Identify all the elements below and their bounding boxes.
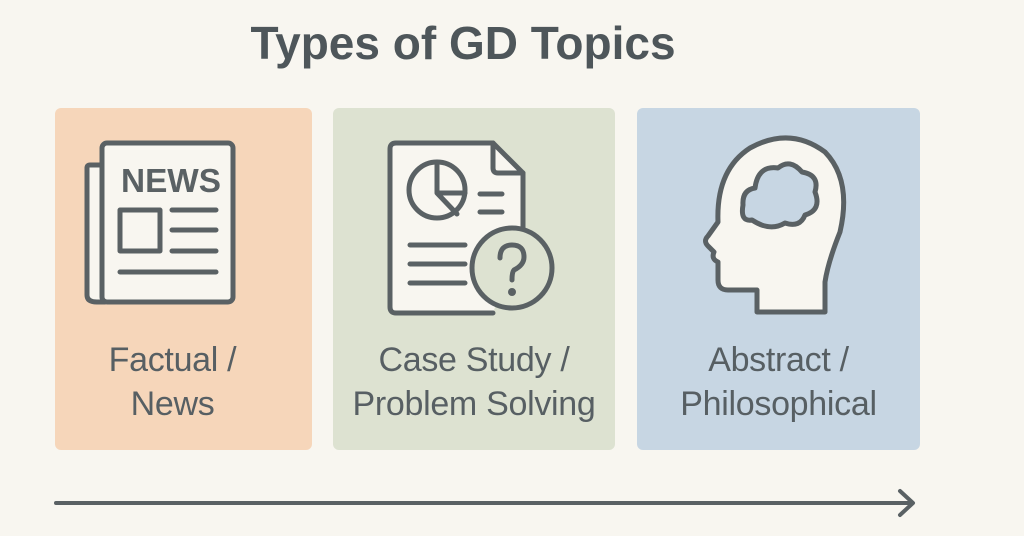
icon: head with cloud (706, 138, 844, 312)
label: abstract: Philosophical (680, 385, 877, 423)
panel: case study (333, 108, 615, 450)
label: abstract: Abstract / (708, 341, 849, 379)
label: factual (109, 341, 236, 423)
icon: newspaper: NEWS (121, 162, 221, 199)
label: case study (352, 341, 596, 423)
label: case study: Case Study / (378, 341, 570, 379)
panel: factual news (55, 108, 312, 450)
label: case study: Problem Solving (352, 385, 596, 423)
label: factual: News (131, 385, 214, 423)
icon: document with chart and question (390, 143, 552, 313)
label: abstract (680, 341, 877, 423)
title: Types of GD Topics (250, 17, 676, 69)
arrow (56, 491, 913, 515)
panel: abstract (637, 108, 920, 450)
icon: newspaper (87, 143, 233, 302)
label: factual: Factual / (109, 341, 236, 379)
